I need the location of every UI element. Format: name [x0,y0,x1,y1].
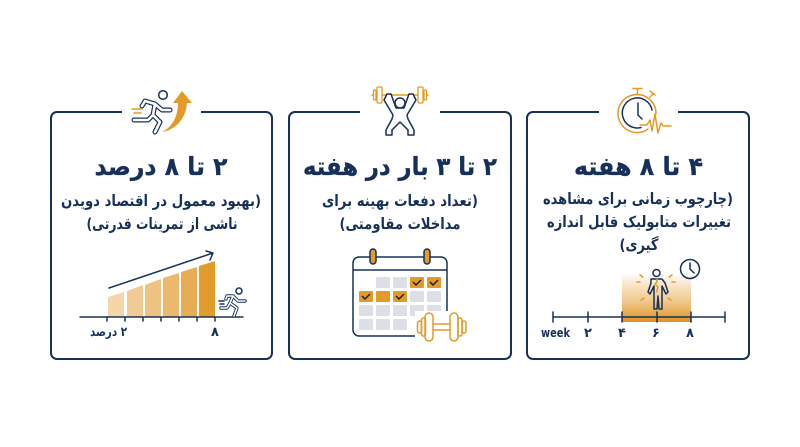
tick labels: ۲ [584,326,592,341]
description: تغییرات متابولیک قابل اندازه [547,213,731,231]
heading: ۲ تا ۳ بار در هفته [303,152,497,181]
axis label: 2 percent: ۲ درصد [90,325,127,340]
description: ناشی از تمرینات قدرتی) [86,215,238,233]
description: (چارچوب زمانی برای مشاهده [543,190,733,209]
description [543,190,733,254]
tick labels: ۴ [618,326,626,341]
axis label: 8: ۸ [211,325,219,340]
panel: time frame [527,88,749,359]
heading: ۴ تا ۸ هفته [574,152,703,181]
icon: stopwatch with pulse [618,88,671,133]
heading: ۲ تا ۸ درصد [94,152,227,181]
bar chart: improvement [80,251,245,340]
tick labels: week [541,326,571,340]
icon: small runner [219,288,245,316]
panel: running economy [51,91,272,359]
icon: dumbbell [415,311,468,343]
highlighted window [622,275,691,322]
trend arrow [109,251,213,288]
icon: body [637,270,675,309]
panel: sessions per week [289,87,511,359]
description [322,192,478,233]
description: گیری) [620,235,659,254]
tick labels: ۶ [652,326,660,341]
description: مداخلات مقاومتی) [340,215,460,233]
description: (بهبود معمول در اقتصاد دویدن [61,192,261,210]
tick labels [541,326,694,341]
tick labels: ۸ [686,326,694,341]
icon: runner with rising arrow [132,91,192,132]
description: (تعداد دفعات بهینه برای [322,192,478,210]
description [61,192,261,233]
timeline [541,260,725,341]
icon: clock [680,260,700,278]
icon: calendar with dumbbell [353,249,468,343]
icon: weightlifter [372,87,428,135]
